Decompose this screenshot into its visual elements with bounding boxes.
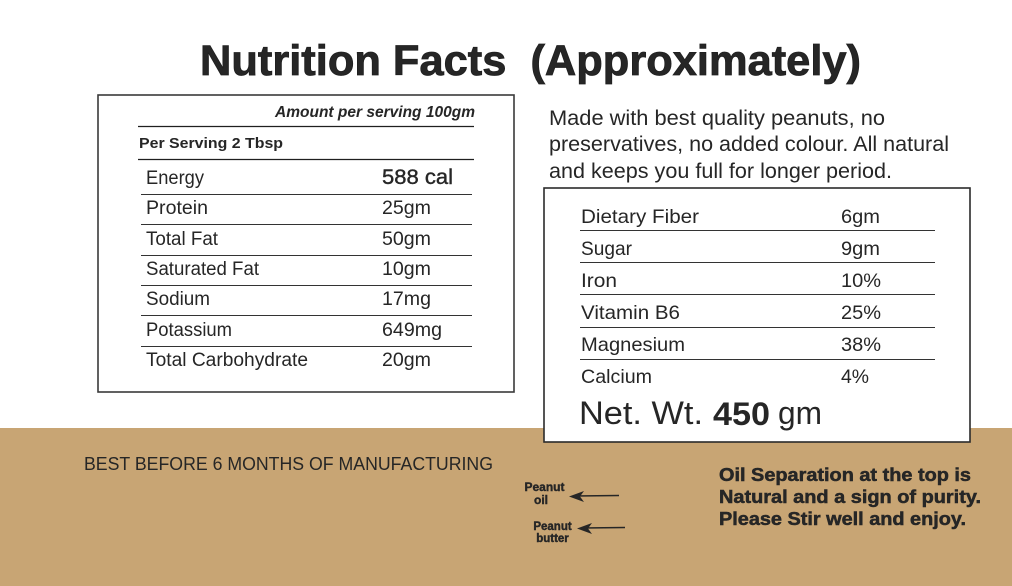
oil separation note: Natural and a sign of purity. <box>719 487 981 507</box>
row: protein: Protein <box>146 198 208 219</box>
tan footer band <box>0 428 1012 586</box>
description text <box>549 107 949 183</box>
row: dietary fiber: Dietary Fiber <box>581 206 700 228</box>
row: vitamin b6: 25% <box>841 302 881 324</box>
row: vitamin b6 <box>581 302 881 324</box>
row: total fat: 50gm <box>382 229 431 250</box>
label: peanut oil: oil <box>534 493 548 507</box>
row: magnesium <box>581 334 881 356</box>
row: sodium: Sodium <box>146 289 210 310</box>
panel: main nutrition table <box>98 95 514 392</box>
row: iron: Iron <box>581 270 617 292</box>
label: peanut oil: Peanut <box>524 480 565 494</box>
oil separation note <box>719 465 981 529</box>
row: iron: 10% <box>841 270 881 292</box>
row: sodium <box>146 289 431 310</box>
net weight: Net. Wt. <box>579 395 703 431</box>
label: peanut butter <box>533 521 572 545</box>
row: energy: 588 cal <box>382 166 453 189</box>
row: iron <box>581 270 881 292</box>
row: dietary fiber <box>581 206 880 228</box>
row: calcium: Calcium <box>581 366 652 388</box>
row: sugar: 9gm <box>841 238 880 260</box>
description text: Made with best quality peanuts, no <box>549 107 885 130</box>
row: saturated fat: Saturated Fat <box>146 259 260 280</box>
description text: and keeps you full for longer period. <box>549 160 892 183</box>
title: Nutrition Facts (Approximately) <box>200 37 861 85</box>
row: saturated fat <box>146 259 431 280</box>
row: protein <box>146 198 431 219</box>
row: sugar: Sugar <box>581 238 632 260</box>
row: sodium: 17mg <box>382 289 431 310</box>
label: peanut butter: butter <box>536 533 569 545</box>
row: potassium <box>146 320 442 341</box>
row: total carbohydrate <box>146 350 431 371</box>
best before note: BEST BEFORE 6 MONTHS OF MANUFACTURING <box>84 454 493 474</box>
row: dietary fiber: 6gm <box>841 206 880 228</box>
row: magnesium: 38% <box>841 334 881 356</box>
arrow: to peanut butter <box>577 523 625 534</box>
net weight <box>579 395 822 432</box>
serving size label: Per Serving 2 Tbsp <box>139 135 283 152</box>
row: total fat: Total Fat <box>146 229 219 250</box>
row: energy: Energy <box>146 167 204 189</box>
row: calcium: 4% <box>841 366 869 388</box>
panel: secondary nutrition table <box>544 188 970 442</box>
net weight: gm <box>778 395 822 431</box>
label: peanut oil <box>524 480 565 507</box>
row: total fat <box>146 229 431 250</box>
row: saturated fat: 10gm <box>382 259 431 280</box>
row: calcium <box>581 366 869 388</box>
label: peanut butter: Peanut <box>533 521 572 533</box>
row: magnesium: Magnesium <box>581 334 685 356</box>
row: total carbohydrate: Total Carbohydrate <box>146 350 308 371</box>
oil separation note: Please Stir well and enjoy. <box>719 509 966 529</box>
row: potassium: Potassium <box>146 320 232 341</box>
serving amount heading: Amount per serving 100gm <box>274 104 475 121</box>
row: protein: 25gm <box>382 198 431 219</box>
net weight: 450 <box>713 396 770 432</box>
description text: preservatives, no added colour. All natural <box>549 133 949 156</box>
row: total carbohydrate: 20gm <box>382 350 431 371</box>
row: energy <box>146 166 453 189</box>
oil separation note: Oil Separation at the top is <box>719 465 971 485</box>
row: potassium: 649mg <box>382 320 442 341</box>
row: sugar <box>581 238 880 260</box>
row: vitamin b6: Vitamin B6 <box>581 302 680 324</box>
arrow: to peanut oil <box>569 491 619 502</box>
